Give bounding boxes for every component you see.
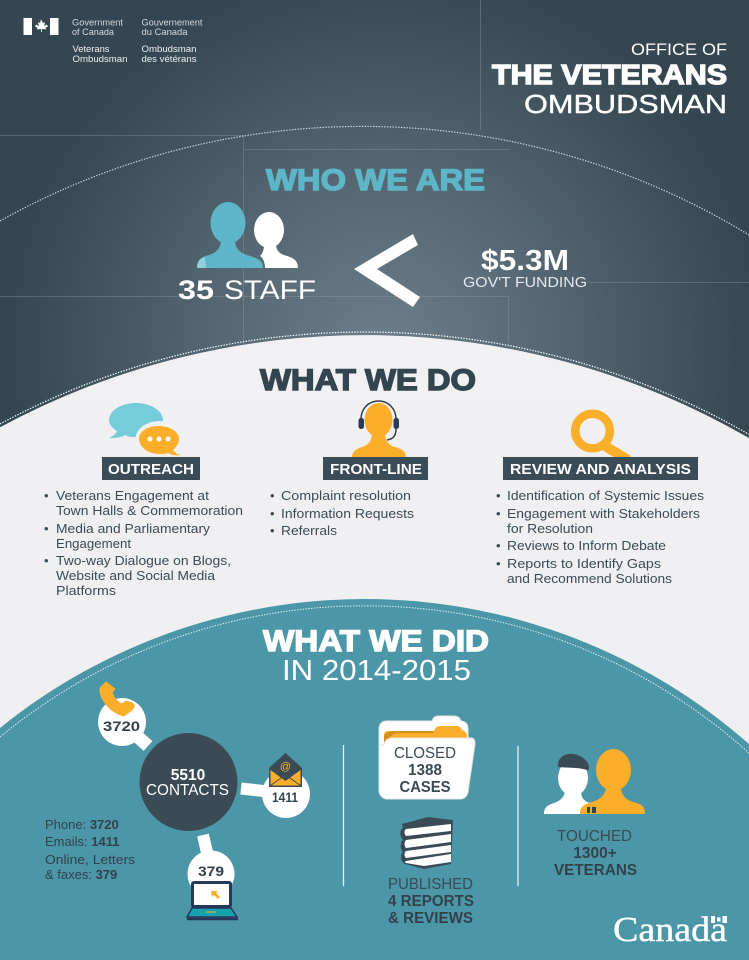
title: THE VETERANS [492, 59, 727, 90]
text: year: IN 2014-2015 [282, 655, 471, 687]
list: review and analysis: Engagement with Stakeholders [507, 506, 701, 521]
icon: canada flag [24, 18, 58, 35]
text: government names: Gouvernement [142, 18, 203, 28]
text: government names: Ombudsman [142, 44, 196, 54]
icon: headset agent [352, 401, 406, 458]
text: closed cases: CLOSED [394, 745, 456, 762]
text: closed cases: CASES [400, 779, 450, 796]
list: outreach: • [44, 521, 49, 536]
list: review and analysis: • [496, 488, 501, 503]
text: published reports: 4 REPORTS [388, 893, 474, 910]
text: touched veterans: TOUCHED [557, 828, 632, 845]
text: government names: Ombudsman [72, 54, 128, 64]
list: review and analysis: Reviews to Inform Debate [507, 538, 666, 553]
icon: folder with closed cases [379, 716, 475, 799]
text: 35 staff: STAFF [224, 275, 316, 305]
phone count: 3720 [103, 718, 140, 734]
list: outreach: Platforms [56, 583, 117, 598]
list: front-line: Information Requests [281, 506, 415, 521]
text: touched veterans: VETERANS [554, 862, 637, 879]
list: outreach: Website and Social Media [56, 568, 216, 583]
canada wordmark: Canada [613, 910, 728, 949]
panel: what we did [0, 599, 749, 960]
icon: speech bubbles [109, 403, 184, 457]
text: 35 staff: 35 [178, 275, 214, 305]
text: government names [72, 18, 203, 64]
list: front-line: Complaint resolution [281, 488, 411, 503]
legend: contact breakdown: Online, Letters [45, 852, 136, 867]
title: OFFICE OF [631, 40, 727, 59]
label: front-line [323, 457, 428, 480]
email count: 1411 [272, 789, 298, 805]
label: outreach: OUTREACH [108, 462, 194, 478]
legend: contact breakdown [45, 817, 136, 882]
legend: contact breakdown: Phone: 3720 [45, 817, 119, 832]
icon: phone [100, 682, 134, 716]
panel: what we do [0, 332, 749, 960]
icon: envelope: @ [280, 761, 291, 773]
list: review and analysis: • [496, 538, 501, 553]
icon: envelope [269, 753, 302, 787]
list: front-line: Referrals [281, 523, 338, 538]
legend: contact breakdown: Emails: 1411 [45, 834, 119, 849]
heading: who we are: WHO WE ARE [266, 164, 485, 197]
icon: two staff people [197, 202, 298, 268]
list: outreach: Veterans Engagement at [56, 488, 209, 503]
title [492, 40, 727, 119]
text: published reports: & REVIEWS [388, 910, 473, 927]
legend: contact breakdown: & faxes: 379 [45, 867, 117, 882]
list: front-line: • [270, 523, 275, 538]
icon: laptop [187, 882, 238, 919]
label: review and analysis: REVIEW AND ANALYSIS [510, 462, 691, 478]
list: outreach: Town Halls & Commemoration [56, 503, 243, 518]
icon: less-than sign [354, 234, 420, 307]
heading: what we do: WHAT WE DO [260, 364, 476, 397]
list: review and analysis: and Recommend Solutions [507, 571, 673, 586]
icon: magnifying glass [575, 414, 628, 460]
list: review and analysis: for Resolution [507, 521, 593, 536]
list: review and analysis: Reports to Identify Gaps [507, 556, 662, 571]
list: outreach: • [44, 553, 49, 568]
list: front-line: • [270, 506, 275, 521]
list: review and analysis: • [496, 506, 501, 521]
icon: veterans [544, 749, 645, 814]
label: front-line: FRONT-LINE [330, 462, 422, 478]
text: government names: Veterans [72, 44, 110, 54]
list: review and analysis: • [496, 556, 501, 571]
list: review and analysis [496, 488, 705, 586]
text: government names: Government [72, 18, 123, 28]
list: outreach [44, 488, 243, 598]
list: review and analysis: Identification of Systemic Issues [507, 488, 705, 503]
text: closed cases: 1388 [408, 762, 442, 779]
text: government names: du Canada [142, 27, 188, 37]
label: outreach [102, 457, 200, 480]
text: touched veterans [554, 828, 637, 879]
text: government names: des vétérans [142, 54, 197, 64]
contacts hub: 5510 [171, 767, 205, 784]
government signature [24, 18, 203, 64]
list: front-line: • [270, 488, 275, 503]
text: funding [463, 245, 587, 291]
text: government names: of Canada [72, 27, 115, 37]
text: closed cases [394, 745, 456, 796]
list: outreach: Engagement [56, 536, 131, 551]
list: outreach: Media and Parliamentary [56, 521, 211, 536]
icon: stack of books [400, 817, 453, 869]
text: published reports [388, 876, 474, 927]
list: front-line [270, 488, 415, 538]
list: outreach: Two-way Dialogue on Blogs, [56, 553, 231, 568]
contacts hub: CONTACTS [146, 782, 229, 799]
text: funding: $5.3M [481, 245, 569, 277]
heading: what we did: WHAT WE DID [263, 625, 489, 658]
text: touched veterans: 1300+ [573, 845, 617, 862]
chart: contacts [98, 682, 310, 919]
text: published reports: PUBLISHED [388, 876, 473, 893]
text: funding: GOV'T FUNDING [463, 274, 587, 291]
title: OMBUDSMAN [524, 89, 727, 119]
label: review and analysis [503, 457, 698, 480]
list: outreach: • [44, 488, 49, 503]
online count: 379 [198, 863, 224, 879]
text: 35 staff [178, 275, 316, 305]
contacts hub [140, 733, 238, 831]
